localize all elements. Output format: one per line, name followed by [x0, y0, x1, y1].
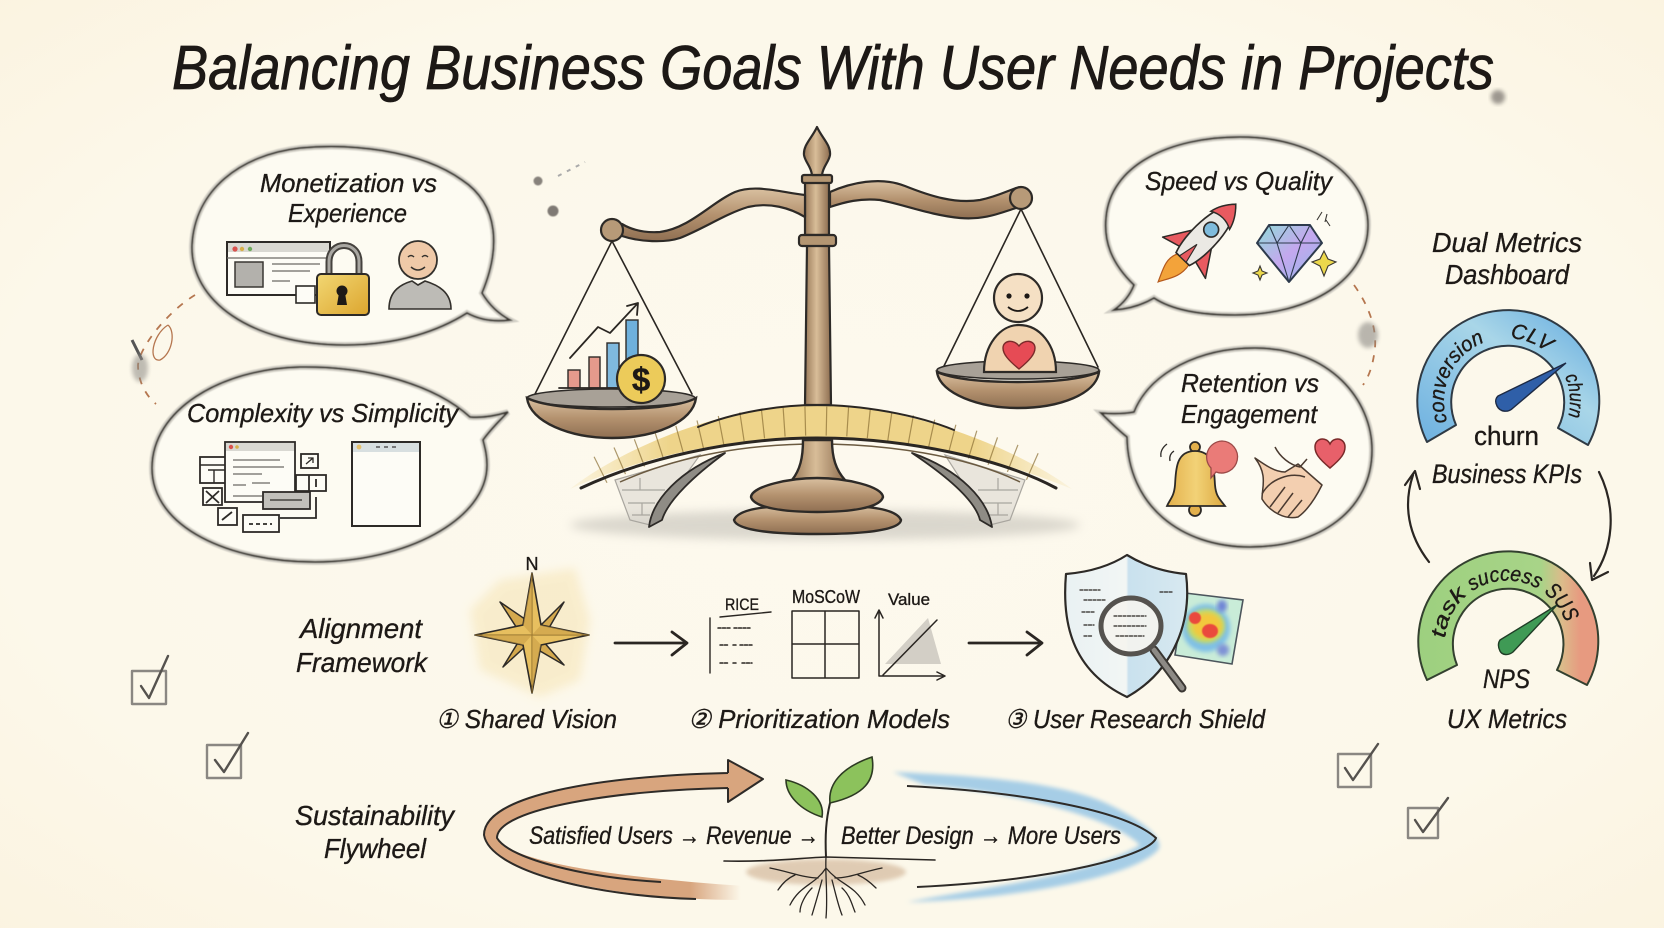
checkbox: left upper: [132, 656, 168, 704]
bridge arch: [649, 453, 992, 527]
heading line 2: Experience: [288, 198, 407, 228]
panel: complexity vs simplicity: [152, 367, 508, 562]
flywheel text: better design to more users: Better Design → More Users: [841, 822, 1121, 850]
icon: browser window: [227, 242, 330, 303]
bridge deck: [570, 405, 1072, 489]
icon: growth bar chart: [559, 303, 638, 388]
checkbox: right upper: [1338, 744, 1378, 787]
connector: dashed arc between left bubbles: [132, 295, 195, 404]
heading: Monetization vs: [260, 168, 437, 198]
arrow: prioritization to research: [969, 632, 1042, 655]
gauge label: UX metrics: UX Metrics: [1447, 704, 1567, 734]
blue arc: [893, 772, 1159, 902]
ground shadow: [570, 510, 1080, 540]
gauge label: business KPIs: Business KPIs: [1432, 459, 1582, 489]
icon: dollar coin: [617, 355, 665, 403]
icon: dollar coin: $: [632, 361, 650, 398]
icon: diamond: [1257, 225, 1322, 282]
speech bubble outline: [192, 147, 510, 345]
connector: dashed arc between right bubbles: [1354, 285, 1378, 385]
panel: speed vs quality: [1106, 137, 1368, 315]
gauge: UX metrics: [1417, 550, 1600, 694]
icon: handshake: [1255, 447, 1322, 518]
panel: monetization vs experience: [192, 147, 510, 345]
ink smudges near the title and the scale: [534, 90, 1505, 216]
heading line 2: Dashboard: [1445, 259, 1570, 290]
step label: shared vision: ① Shared Vision: [436, 704, 617, 734]
icon: heart: [1315, 439, 1345, 468]
gauge: UX metrics: success: [1468, 569, 1542, 590]
heading: Speed vs Quality: [1145, 166, 1334, 196]
gauge: UX metrics: SUS: [1546, 584, 1579, 620]
gauge: business KPIs: CLV: [1512, 324, 1557, 348]
flywheel text: satisfied users to revenue: Satisfied Users → Revenue →: [529, 822, 819, 850]
right pan: user needs: [937, 209, 1099, 408]
panel: alignment framework: [296, 554, 1266, 734]
icon: compass star: N: [526, 554, 538, 574]
gauge: UX metrics: NPS: [1483, 664, 1530, 694]
title: Balancing Business Goals With User Needs in Projects: [172, 34, 1494, 103]
checkbox: right lower: [1408, 798, 1448, 838]
icon: prioritization models: RICE: [725, 595, 759, 614]
heading: Complexity vs Simplicity: [187, 398, 460, 428]
heading line 2: Engagement: [1181, 399, 1319, 429]
heading: Alignment: [298, 613, 423, 644]
panel: sustainability flywheel: [295, 757, 1159, 918]
step label: prioritization models: ② Prioritization Models: [688, 704, 950, 734]
icon: user research shield: [1065, 555, 1187, 697]
speech bubble outline: [152, 367, 508, 562]
icon: notification bell: [1161, 441, 1238, 516]
speech bubble outline: [1101, 348, 1372, 547]
panel: dual metrics dashboard: [1404, 227, 1612, 734]
bridge masonry: [615, 455, 1025, 525]
step label: user research shield: ③ User Research Shield: [1005, 704, 1266, 734]
gauge: UX metrics: task: [1432, 586, 1466, 637]
icon: magnifying glass: [1101, 598, 1182, 688]
arrow: business to UX: [1590, 472, 1611, 580]
heading line 2: Framework: [296, 647, 429, 678]
icon: heatmap card: [1175, 593, 1243, 664]
pan bowl: [527, 398, 696, 438]
icon: prioritization models: [710, 587, 945, 680]
icon: simple window: [352, 442, 420, 526]
arrow: UX to business: [1405, 471, 1429, 562]
icon: seedling with roots: [724, 757, 935, 918]
arrow: vision to prioritization: [615, 632, 687, 655]
icon: smiling user with heart: [984, 274, 1056, 372]
scale base: [734, 440, 901, 534]
icon: padlock: [317, 246, 369, 315]
checkbox: left lower: [207, 733, 248, 778]
icon: compass star: [470, 554, 590, 697]
scale column and finial: [799, 127, 836, 405]
icon: sparkles: [1253, 212, 1336, 280]
icon: cluttered interface: [200, 442, 326, 532]
gauge: business KPIs: [1416, 309, 1600, 451]
decorative checkboxes: [132, 656, 1448, 838]
heading: Sustainability: [295, 800, 456, 831]
gauge: business KPIs: churn: [1566, 374, 1583, 418]
icon: smiling person: [389, 241, 451, 309]
gauge: business KPIs: churn: [1474, 421, 1539, 451]
heading: Retention vs: [1181, 368, 1319, 398]
pan bowl: [937, 372, 1099, 408]
left pan: business goals: [527, 241, 696, 438]
pan rim: [937, 361, 1099, 379]
central balance scale on bridge: [527, 127, 1099, 540]
brown arrow: [484, 760, 763, 906]
icon: rocket: [1138, 184, 1257, 304]
gauge: business KPIs: conversion: [1432, 332, 1483, 423]
icon: prioritization models: Value: [888, 590, 930, 609]
pan rim: [527, 389, 695, 407]
heading line 2: Flywheel: [324, 833, 427, 864]
panel: retention vs engagement: [1101, 348, 1372, 547]
icon: prioritization models: MoSCoW: [792, 587, 860, 607]
speech bubble outline: [1106, 137, 1368, 315]
scale beam: [601, 181, 1032, 241]
heading: Dual Metrics: [1432, 227, 1582, 258]
